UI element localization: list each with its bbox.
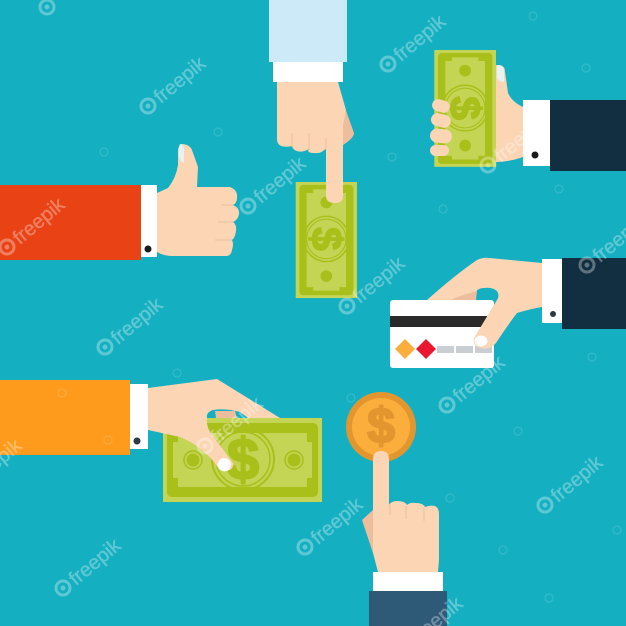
hand gripping the card [427,258,542,348]
watermarks: freepik: freepik [349,252,410,308]
navy sleeve [369,591,447,626]
palm and thumb [148,417,233,473]
panel: finger on coin (bottom) [346,392,447,626]
icon: gold dollar coin: $ [367,398,395,454]
watermarks: freepik: freepik [390,10,451,66]
light blue sleeve [269,0,347,62]
panel: hand holding bill (top right) [429,50,626,171]
watermarks: freepik: freepik [449,351,510,407]
watermarks: freepik: freepik [250,152,311,208]
white cuff [273,62,343,82]
panel: hand holding bill (bottom left) [0,379,322,502]
white cuff [373,572,443,591]
hand pointing up [362,451,439,572]
icon: horizontal banknote [163,418,322,502]
thumbs up hand [157,144,239,256]
watermarks: freepik: freepik [547,451,608,507]
white cuff with button [130,384,148,449]
watermarks: freepik: freepik [207,392,268,448]
hand palm and thumb [492,65,523,162]
orange sleeve [0,380,130,455]
icon: gold dollar coin [346,392,416,462]
dark navy sleeve [550,100,626,171]
watermarks: freepik: freepik [65,534,126,590]
icon: vertical banknote [434,50,496,167]
panel: hand holding credit card (right) [390,258,626,368]
icon: vertical banknote [296,182,357,298]
red sleeve [0,185,141,260]
icon: vertical banknote: $ [440,96,488,120]
watermarks: freepik: freepik [150,52,211,108]
white cuff with button [523,100,550,166]
white cuff with button [141,185,157,257]
hand pointing down [277,82,354,203]
fingers over the bill [429,98,453,156]
white cuff with button [542,259,562,323]
watermarks: freepik: freepik [490,111,551,167]
credit card [390,300,494,368]
watermarks: freepik: freepik [307,493,368,549]
dark navy sleeve [562,258,626,329]
panel: pointing hand on bill (top) [269,0,357,298]
icon: vertical banknote: $ [303,227,350,251]
watermarks: freepik: freepik [107,293,168,349]
icon: horizontal banknote: $ [227,427,259,492]
back of hand and fingers [148,379,280,418]
panel: thumbs up (left) [0,144,239,260]
watermarks: freepik: freepik [9,193,70,249]
